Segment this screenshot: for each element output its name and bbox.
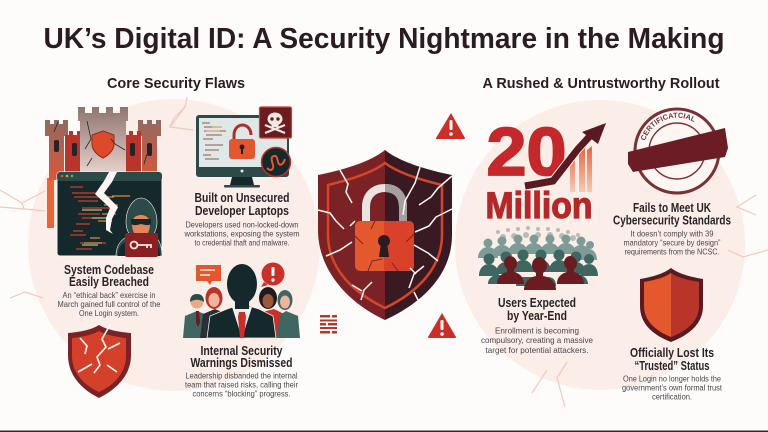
text block: cybersecurity standards: Fails to Meet UK (633, 201, 711, 215)
text block: trusted status: “Trusted” Status (634, 359, 710, 373)
heading: rollout: A Rushed & Untrustworthy Rollout (482, 75, 720, 92)
icon: warning triangle top (436, 113, 465, 139)
text block: developer laptops: Built on Unsecured (194, 191, 290, 205)
icon: dismissed staff group (183, 262, 300, 338)
text block: cybersecurity standards: Cybersecurity Standards (613, 214, 731, 228)
text block: cybersecurity standards (613, 201, 731, 256)
big number: 20 Million with rising arrow (486, 114, 606, 226)
text block: cybersecurity standards: It doesn’t comply with 39 (630, 228, 714, 238)
text block: system codebase: An “ethical back” exercise in (62, 290, 156, 300)
text block: cybersecurity standards: requirements from the NCSC. (624, 246, 720, 256)
text block: developer laptops (184, 191, 300, 248)
text block: trusted status: One Login no longer holds the (623, 374, 721, 384)
text block: users expected (481, 296, 593, 355)
text block: trusted status: Officially Lost Its (630, 346, 714, 360)
text block: system codebase: March gained full control of the (58, 299, 161, 309)
icon: warning triangle bottom (428, 313, 456, 338)
text block: developer laptops: workstations, exposing the system (184, 228, 300, 238)
text block: trusted status: government’s own formal trust (622, 382, 723, 392)
icon: crowd of users (478, 226, 598, 290)
icon: crossed out certification stamp (628, 108, 728, 194)
text block: system codebase: Easily Breached (69, 275, 149, 289)
icon: broken bricks (320, 315, 337, 334)
icon: monitor with skull and worm (196, 107, 292, 188)
text block: system codebase (58, 263, 161, 318)
text block: warnings dismissed: Warnings Dismissed (190, 356, 292, 370)
big number: 20 Million with rising arrow: 20 (486, 114, 566, 190)
text block: users expected: by Year-End (507, 309, 567, 323)
text block: users expected: compulsory, creating a massive (481, 335, 593, 345)
heading: core security flaws: Core Security Flaws (107, 75, 245, 92)
text block: trusted status (622, 346, 723, 402)
text block: system codebase: System Codebase (64, 263, 154, 277)
background circle: left panel (28, 99, 320, 391)
text block: developer laptops: Developers used non-locked-down (186, 220, 299, 230)
icon: crossed out certification stamp: CERTIFICATCIAL (641, 112, 694, 140)
icon: broken shield (68, 325, 131, 398)
text block: users expected: Users Expected (498, 296, 576, 310)
text block: developer laptops: to credential thaft and malware. (194, 238, 290, 248)
icon: central cracked shield with padlock (318, 150, 452, 320)
text block: warnings dismissed: Leadership disbanded the internal (186, 370, 298, 380)
text block: warnings dismissed (185, 344, 298, 398)
text block: trusted status: certification. (652, 392, 692, 402)
text block: cybersecurity standards: mandatory “secure by design” (624, 238, 721, 248)
icon: cracked castle with code window and hacker (45, 107, 162, 257)
icon: orange trust shield (640, 268, 703, 342)
big number: 20 Million with rising arrow: Million (486, 185, 592, 226)
background circle: right panel (455, 100, 745, 390)
title: UK’s Digital ID: A Security Nightmare in the Making (44, 23, 724, 55)
text block: users expected: target for potential attackers. (486, 345, 588, 355)
text block: users expected: Enrollment is becoming (495, 326, 579, 336)
text block: warnings dismissed: Internal Security (200, 344, 283, 358)
text block: system codebase: One Login system. (79, 308, 139, 318)
text block: warnings dismissed: team that raised risks, calling their (185, 380, 298, 390)
text block: warnings dismissed: concerns “blocking” progress. (192, 388, 290, 398)
text block: developer laptops: Developer Laptops (195, 204, 289, 218)
